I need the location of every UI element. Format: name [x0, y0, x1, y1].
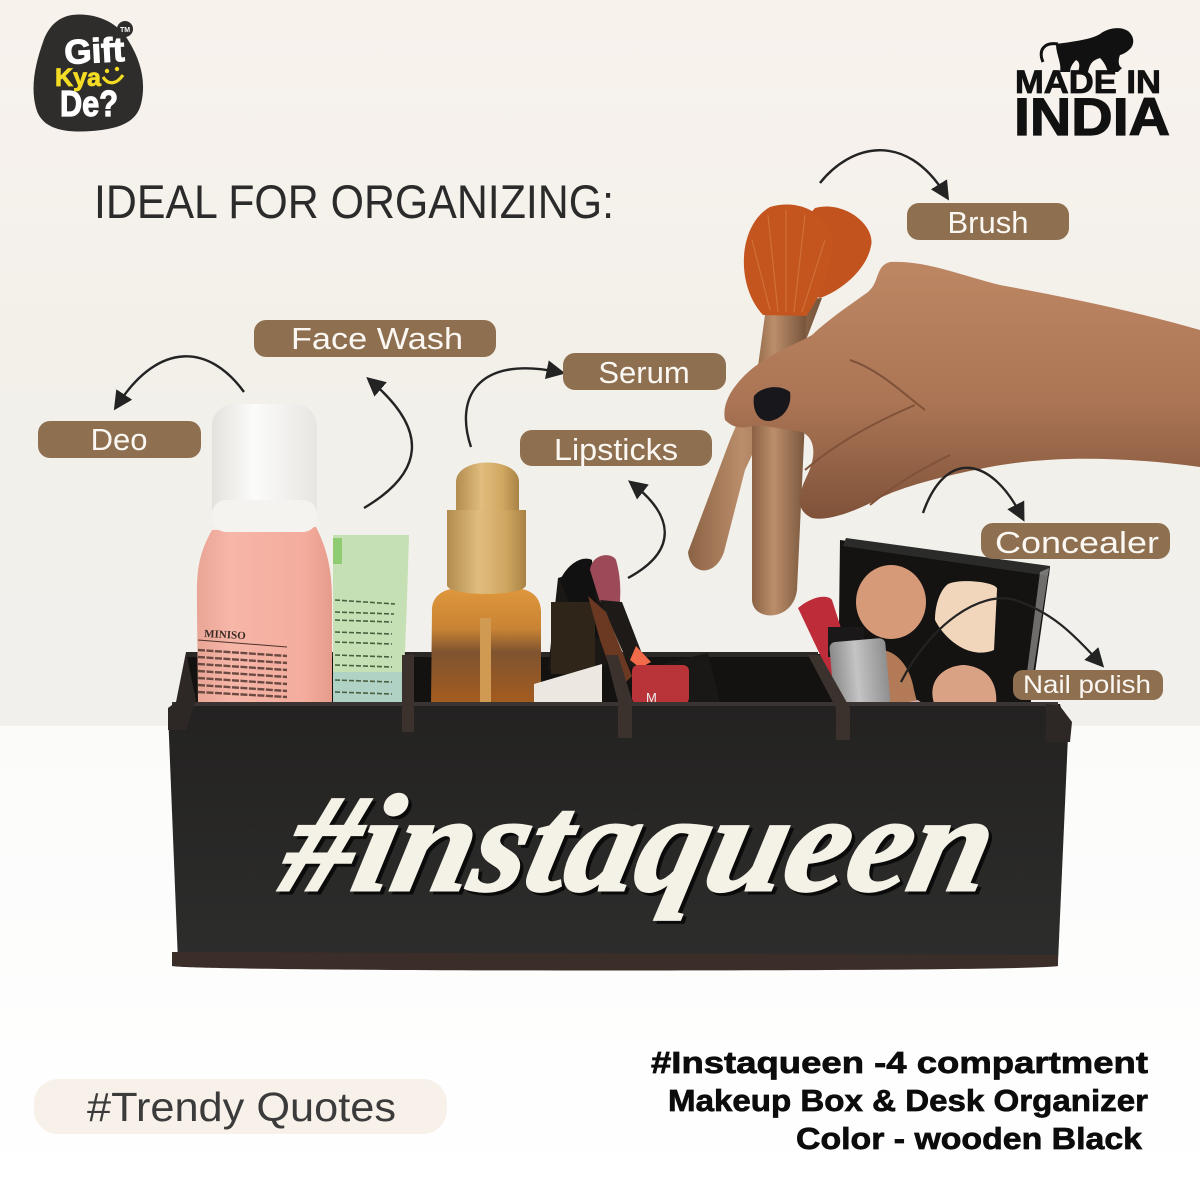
lipstick and brush group, second compartment: M — [646, 690, 657, 705]
#instaqueen sign: #instaqueen — [273, 771, 1014, 924]
box base — [172, 952, 1058, 970]
tag: Trendy Quotes: #Trendy Quotes — [87, 1084, 396, 1130]
label: Lipsticks — [520, 430, 712, 467]
label: Serum — [563, 353, 726, 390]
arrow: lipsticks — [628, 485, 665, 578]
icon: back brush — [688, 298, 822, 570]
logo: Gift Kya De: TM — [120, 27, 130, 34]
arrow: brush — [820, 150, 945, 194]
product description: Makeup Box & Desk Organizer — [668, 1083, 1148, 1118]
logo: Gift Kya De: Gift — [63, 31, 125, 72]
icon: thumb nail — [754, 387, 790, 421]
face wash tube — [333, 535, 409, 702]
label: Concealer: Concealer — [995, 525, 1159, 560]
box front panel — [168, 702, 1068, 962]
icon: front brush — [752, 315, 806, 615]
brushes and hand — [688, 205, 1200, 615]
label: Deo: Deo — [91, 422, 147, 457]
deodorant bottle — [197, 404, 332, 702]
label: Serum: Serum — [598, 355, 690, 390]
logo: Made in India: INDIA — [1014, 88, 1170, 147]
box back and interior — [186, 652, 836, 714]
deodorant bottle: MINISO — [204, 628, 246, 642]
logo: Made in India: MADE IN — [1015, 64, 1161, 100]
lipstick and brush group, second compartment — [534, 555, 720, 705]
label: Deo — [38, 421, 201, 458]
label: Brush: Brush — [948, 205, 1028, 240]
label: Lipsticks: Lipsticks — [554, 432, 678, 467]
product description: #Instaqueen -4 compartment — [651, 1045, 1148, 1080]
arrow: deo — [118, 356, 244, 404]
tag: Trendy Quotes — [34, 1079, 447, 1134]
concealer palette — [838, 538, 1050, 708]
icon: hand — [724, 262, 1200, 519]
organizer box — [168, 652, 1072, 970]
arrow: serum — [466, 368, 558, 447]
product description — [651, 1045, 1148, 1156]
#instaqueen sign: #instaqueen — [270, 768, 1010, 921]
label: Nail polish: Nail polish — [1023, 671, 1151, 699]
arrow: concealer — [923, 468, 1021, 515]
label: Brush — [907, 203, 1069, 240]
label: Face Wash: Face Wash — [291, 321, 463, 356]
heading: IDEAL FOR ORGANIZING: — [94, 175, 614, 228]
logo: Made in India — [1014, 28, 1170, 147]
logo: Gift Kya De: De? — [60, 83, 118, 124]
product description: Color - wooden Black — [796, 1121, 1143, 1156]
logo: Gift Kya De — [34, 14, 143, 132]
serum bottle — [431, 462, 541, 704]
dividers — [168, 652, 196, 730]
label: Face Wash — [254, 320, 496, 357]
icon: lion — [1041, 28, 1133, 72]
lipsticks, third compartment — [798, 597, 926, 710]
arrow: nail polish — [901, 598, 1099, 682]
logo: Gift Kya De: Kya — [55, 64, 102, 92]
arrow: face wash — [364, 382, 412, 508]
